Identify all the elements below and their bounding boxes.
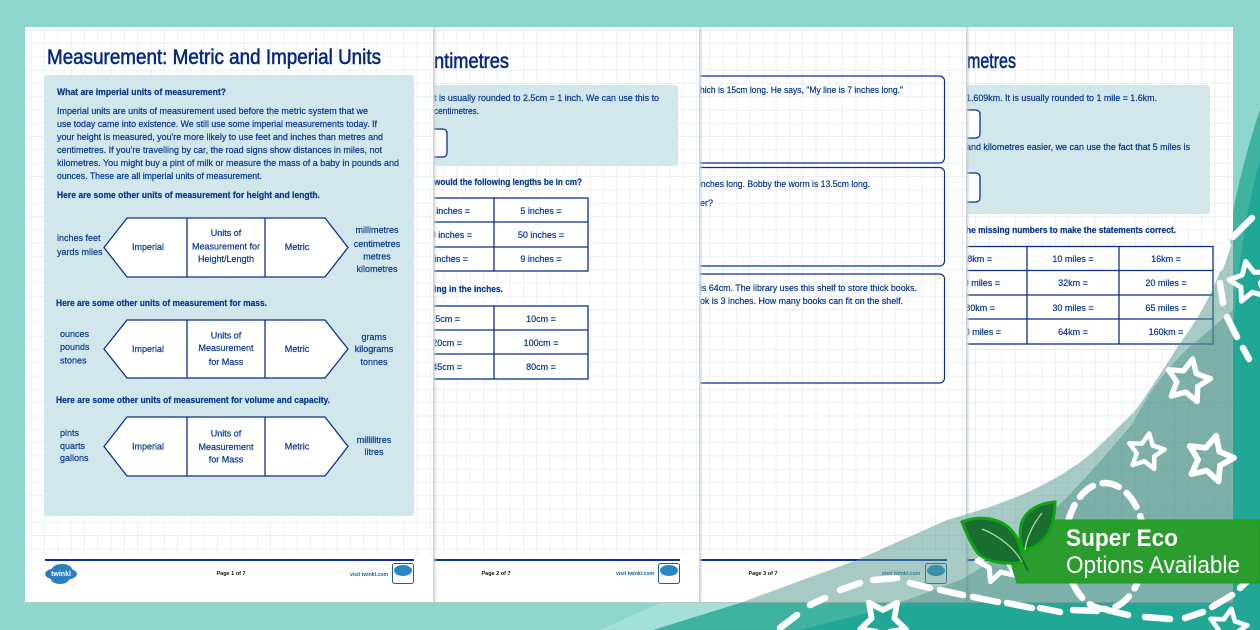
- table: cm to inches: 5cm =: [435, 314, 460, 324]
- logo: twinkl cloud: [45, 564, 77, 584]
- logo: quality badge: [392, 564, 414, 584]
- intro text: kilometres. You might buy a pint of milk or measure the mass of a baby in pounds and: [57, 158, 399, 168]
- table: miles and kilometres: 20 miles =: [1145, 278, 1187, 288]
- diagram: volume and capacity: pints: [60, 428, 80, 438]
- table: miles and kilometres: 30 miles =: [1052, 303, 1094, 313]
- diagram: height and length: inches feet: [57, 233, 101, 243]
- intro text: Imperial units are units of measurement used before the metric system that we: [57, 106, 368, 116]
- footer page 1: visit twinkl.com: [350, 572, 388, 578]
- table: miles and kilometres: 16km =: [1151, 254, 1181, 264]
- diagram: height and length: yards miles: [57, 247, 103, 257]
- table: inches to cm: [420, 198, 588, 271]
- diagram: volume and capacity: [60, 417, 392, 476]
- problem box 2: [680, 168, 944, 266]
- dashed trails: [1220, 218, 1252, 359]
- diagram: height and length: Height/Length: [198, 254, 254, 264]
- diagram: height and length: kilometres: [356, 264, 398, 274]
- diagram: mass: Imperial: [132, 344, 164, 354]
- diagram: height and length: [57, 218, 401, 277]
- diagram: mass: grams: [361, 332, 387, 342]
- panel: miles conversion fact: [950, 85, 1210, 214]
- heading: height and length: Here are some other units of measurement for height and length.: [57, 190, 320, 200]
- diagram: volume and capacity: litres: [364, 447, 384, 457]
- dark teal swoosh: [800, 160, 1260, 630]
- stars: [860, 257, 1260, 630]
- corner swoosh: [600, 110, 1260, 630]
- intro text: your height is measured, you're more likely to use feet and inches than metres and: [57, 132, 383, 142]
- table: miles and kilometres: 8km =: [967, 254, 992, 264]
- footer page 2: visit twinkl.com: [616, 571, 654, 577]
- diagram: mass: tonnes: [360, 357, 388, 367]
- table: cm to inches: 80cm =: [526, 362, 556, 372]
- page 4: miles and kilometres worksheet: metres: [967, 50, 1016, 73]
- intro text: [57, 106, 399, 181]
- diagram: height and length: millimetres: [355, 225, 399, 235]
- badge: Super Eco Options Available: Super Eco: [1066, 525, 1178, 552]
- panel: inches conversion fact: t is usually rounded to 2.5cm = 1 inch. We can use this to: [434, 93, 659, 103]
- table: cm to inches: [420, 306, 588, 379]
- table: inches to cm: 0 inches =: [431, 230, 472, 240]
- diagram: mass: Units of: [211, 330, 242, 340]
- table: inches to cm: inches =: [434, 254, 468, 264]
- table: cm to inches: 10cm =: [526, 314, 556, 324]
- problem box 3: ok is 3 inches. How many books can fit on the shelf.: [700, 296, 903, 306]
- problem box 2: er?: [700, 198, 713, 208]
- footer page 1: [45, 559, 414, 584]
- diagram: volume and capacity: Units of: [211, 428, 242, 438]
- diagram: volume and capacity: Metric: [285, 442, 310, 452]
- diagram: mass: stones: [60, 356, 87, 366]
- badge: Super Eco Options Available: [962, 502, 1260, 583]
- diagram: height and length: metres: [363, 252, 391, 262]
- table: miles and kilometres: 80km =: [965, 303, 995, 313]
- diagram: mass: pounds: [60, 342, 90, 352]
- problem box 3: [680, 274, 944, 383]
- footer page 2: Page 2 of 7: [481, 571, 511, 577]
- panel: explanation: [44, 75, 414, 516]
- diagram: volume and capacity: Measurement: [198, 442, 254, 452]
- page 1: metric and imperial units: [25, 27, 434, 603]
- footer page 3: visit twinkl.com: [882, 571, 920, 577]
- heading: mass: Here are some other units of measurement for mass.: [56, 298, 267, 308]
- logo: twinkl cloud: twinkl: [51, 571, 71, 578]
- table: miles and kilometres: 160km =: [1149, 327, 1183, 337]
- intro text: use today came into existence. We still use some imperial measurements today. If: [57, 119, 377, 129]
- badge: Super Eco Options Available: Options Available: [1066, 552, 1240, 579]
- page 4: miles and kilometres worksheet: [950, 27, 1233, 603]
- table: miles and kilometres: 0 miles =: [965, 327, 1001, 337]
- footer page 2: [434, 559, 680, 584]
- icon: leaves: [962, 502, 1055, 571]
- table: cm to inches: 100cm =: [524, 338, 558, 348]
- problem box 3: is 64cm. The library uses this shelf to store thick books.: [700, 283, 917, 293]
- footer page 3: [700, 559, 947, 584]
- table: miles and kilometres: 64km =: [1058, 327, 1088, 337]
- panel: inches conversion fact: [420, 85, 678, 166]
- instruction 2: ing in the inches.: [434, 284, 503, 294]
- panel: miles conversion fact: 1.609km. It is usually rounded to 1 mile = 1.6km.: [966, 93, 1157, 103]
- page 2: inches and centimetres worksheet: [420, 27, 700, 603]
- diagram: volume and capacity: millilitres: [357, 435, 392, 445]
- table: miles and kilometres: 32km =: [1058, 278, 1088, 288]
- table: cm to inches: 20cm =: [432, 338, 462, 348]
- table: inches to cm: 9 inches =: [429, 206, 470, 216]
- page 3: word problems worksheet: [680, 27, 967, 603]
- table: inches to cm: 5 inches =: [520, 206, 562, 216]
- diagram: mass: Metric: [285, 344, 310, 354]
- footer page 3: Page 3 of 7: [748, 571, 778, 577]
- lighter strip beneath pages: [600, 603, 740, 630]
- diagram: volume and capacity: gallons: [60, 453, 89, 463]
- heading: volume and capacity: Here are some other units of measurement for volume and capacity.: [56, 395, 330, 405]
- instruction: he missing numbers to make the statements correct.: [966, 225, 1176, 235]
- page 2: inches and centimetres worksheet: ntimetres: [434, 50, 509, 73]
- panel: miles conversion fact: and kilometres easier, we can use the fact that 5 miles is: [966, 142, 1190, 152]
- diagram: mass: Measurement: [198, 343, 254, 353]
- diagram: mass: [60, 320, 394, 378]
- table: miles and kilometres: 65 miles =: [1145, 303, 1187, 313]
- problem box 2: inches long. Bobby the worm is 13.5cm long.: [699, 179, 870, 189]
- diagram: mass: ounces: [60, 329, 90, 339]
- intro text: centimetres. If you're travelling by car, the road signs show distances in miles, not: [57, 145, 382, 155]
- problem box 1: [680, 76, 944, 163]
- diagram: height and length: Imperial: [132, 242, 164, 252]
- diagram: volume and capacity: Imperial: [132, 442, 164, 452]
- problem box 1: hich is 15cm long. He says, "My line is 7 inches long.": [700, 85, 903, 95]
- panel: inches conversion fact: centimetres.: [434, 106, 479, 116]
- intro heading: What are imperial units of measurement?: [57, 87, 226, 97]
- intro text: ounces. These are all imperial units of measurement.: [57, 171, 262, 181]
- table: cm to inches: 45cm =: [432, 362, 462, 372]
- instruction 1: would the following lengths be in cm?: [433, 177, 582, 187]
- title: Measurement: Metric and Imperial Units: [47, 46, 381, 69]
- footer page 1: Page 1 of 7: [216, 571, 246, 577]
- table: miles and kilometres: [950, 246, 1213, 344]
- table: inches to cm: 50 inches =: [518, 230, 564, 240]
- diagram: height and length: centimetres: [354, 239, 401, 249]
- table: miles and kilometres: 0 miles =: [964, 278, 1000, 288]
- diagram: volume and capacity: quarts: [60, 441, 86, 451]
- diagram: height and length: Measurement for: [192, 242, 260, 252]
- translucent overlay on pages: [740, 230, 1233, 603]
- table: miles and kilometres: 10 miles =: [1052, 254, 1094, 264]
- mid teal swoosh: [653, 110, 1260, 630]
- diagram: height and length: Metric: [285, 242, 310, 252]
- table: inches to cm: 9 inches =: [520, 254, 562, 264]
- diagram: mass: for Mass: [209, 357, 244, 367]
- diagram: height and length: Units of: [211, 228, 242, 238]
- diagram: volume and capacity: for Mass: [209, 454, 244, 464]
- diagram: mass: kilograms: [355, 344, 394, 354]
